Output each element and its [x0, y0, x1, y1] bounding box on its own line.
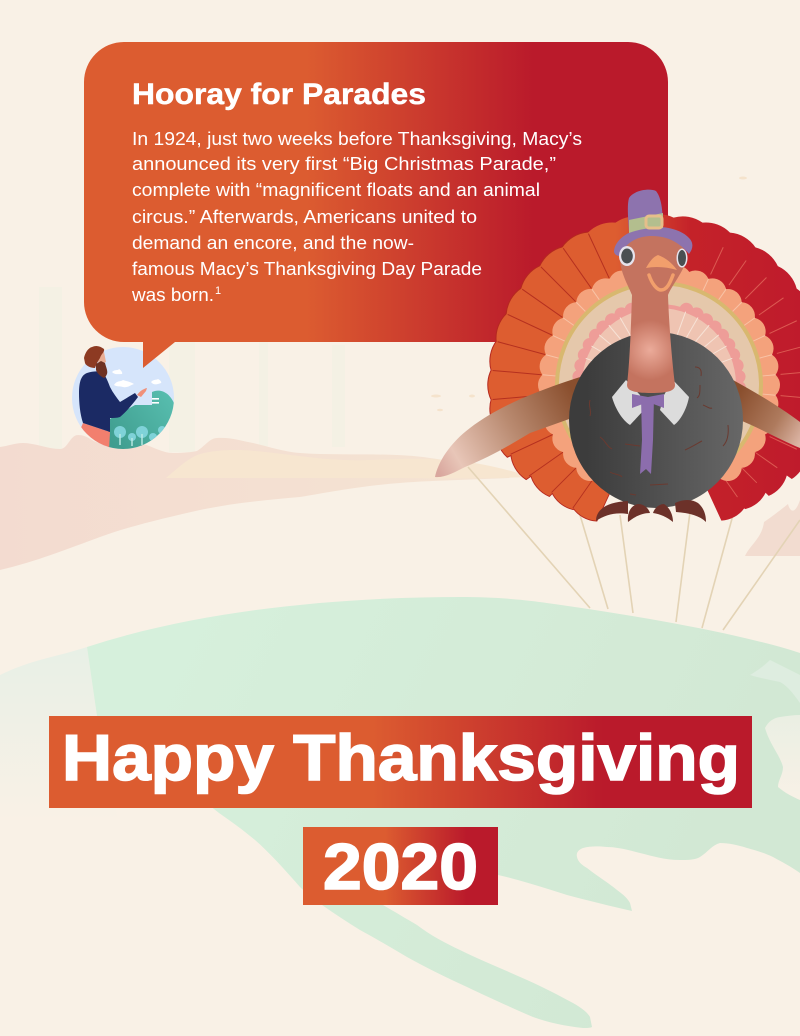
bubble body text: complete with “magnificent floats and an animal — [132, 180, 540, 200]
turkey body — [569, 332, 743, 508]
icon: person avatar — [72, 346, 174, 450]
turkey bow tie — [632, 394, 664, 474]
green land: pale inlet — [765, 715, 800, 800]
bubble body text: circus.” Afterwards, Americans united to — [132, 207, 477, 227]
bubble body text: demand an encore, and the now- — [132, 233, 414, 253]
bubble body text: was born. — [131, 285, 214, 305]
turkey beak and smile — [646, 255, 677, 290]
speech bubble — [84, 42, 668, 368]
turkey head and neck — [620, 235, 687, 393]
title text: Happy Thanksgiving — [62, 721, 740, 794]
bubble body text: 1 — [215, 285, 221, 297]
hill: pink — [0, 435, 510, 570]
year text: 2020 — [323, 830, 478, 903]
bubble body text: announced its very first “Big Christmas Parade,” — [132, 154, 556, 174]
title banner — [49, 716, 752, 808]
turkey right wing — [733, 380, 800, 448]
floating leaf specks — [431, 176, 747, 411]
green land — [87, 597, 800, 1028]
bubble body text — [131, 129, 582, 305]
green land: pale notch — [750, 660, 800, 703]
turkey balloon — [435, 190, 800, 530]
turkey olive and beige ring — [557, 283, 761, 487]
turkey inner pale feathers — [582, 308, 736, 462]
turkey pink feather ring — [572, 301, 746, 466]
turkey hat — [614, 190, 692, 256]
faint city towers — [39, 287, 345, 452]
turkey outer tail fan — [480, 205, 800, 530]
turkey left wing — [435, 377, 580, 477]
hill: beige — [166, 450, 530, 478]
turkey collar — [612, 380, 689, 425]
turkey eyes — [619, 246, 688, 268]
year banner — [303, 827, 498, 905]
turkey feet — [596, 500, 706, 522]
bubble heading: Hooray for Parades — [132, 78, 426, 111]
turkey peach feather ring — [537, 263, 781, 497]
turkey peach feather lines — [542, 279, 776, 395]
hill fragment right — [745, 500, 800, 556]
green land: pale left edge — [0, 647, 120, 830]
balloon strings — [468, 467, 800, 630]
bubble body text: famous Macy’s Thanksgiving Day Parade — [132, 259, 482, 279]
bubble body text: In 1924, just two weeks before Thanksgiving, Macy’s — [132, 129, 582, 149]
